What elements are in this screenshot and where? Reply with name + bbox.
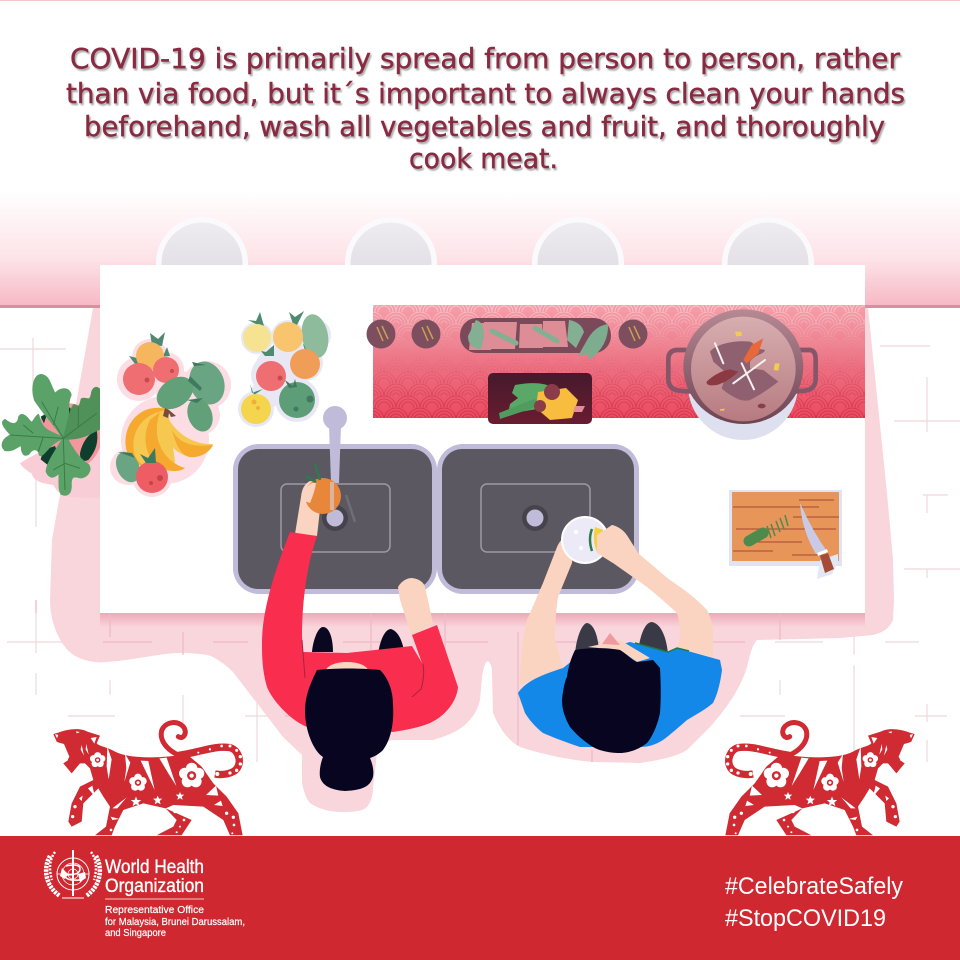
WHO wordmark: Representative Office [105, 905, 204, 916]
red footer [0, 836, 960, 960]
title text: than via food, but it´s important to always clean your hands [66, 77, 905, 110]
hashtags [725, 873, 903, 932]
hashtags: #StopCOVID19 [725, 905, 886, 932]
person in red top [262, 464, 458, 791]
faucet [323, 406, 355, 522]
hashtags: #CelebrateSafely [725, 873, 903, 900]
title text [66, 42, 905, 175]
counter top [100, 265, 865, 613]
fruit pile: right [238, 311, 332, 427]
sink basins [233, 444, 639, 594]
title text: beforehand, wash all vegetables and fruit, and thoroughly [84, 110, 885, 143]
tiger right [725, 723, 915, 835]
person in blue top [518, 517, 722, 753]
red patterned stove band [373, 305, 865, 418]
burners [366, 320, 648, 348]
title text: COVID-19 is primarily spread from person to person, rather [70, 42, 900, 75]
cooking board with vegetables [488, 373, 592, 424]
WHO wordmark: for Malaysia, Brunei Darussalam, [105, 917, 245, 928]
pot [668, 309, 816, 440]
man's arms [520, 525, 713, 685]
WHO wordmark: Organization [105, 876, 204, 897]
fruit pile: left [110, 332, 231, 497]
griddle with meat and greens [460, 318, 611, 360]
tiger left [53, 723, 243, 835]
stools [156, 217, 814, 309]
cutting board with cucumber and knife [729, 490, 842, 579]
floor tile marks [0, 338, 960, 765]
potted plant [3, 375, 102, 498]
WHO wordmark: World Health [105, 857, 204, 878]
WHO emblem [46, 850, 100, 898]
WHO wordmark [105, 857, 245, 939]
bowl and sponge [562, 517, 608, 563]
woman's reaching arm and hand [295, 464, 341, 536]
WHO wordmark: and Singapore [105, 928, 166, 939]
title text: cook meat. [409, 142, 558, 175]
floor tile lines on pink [36, 600, 780, 762]
pink floor shadow [50, 308, 894, 812]
shadow under counter [100, 613, 865, 627]
